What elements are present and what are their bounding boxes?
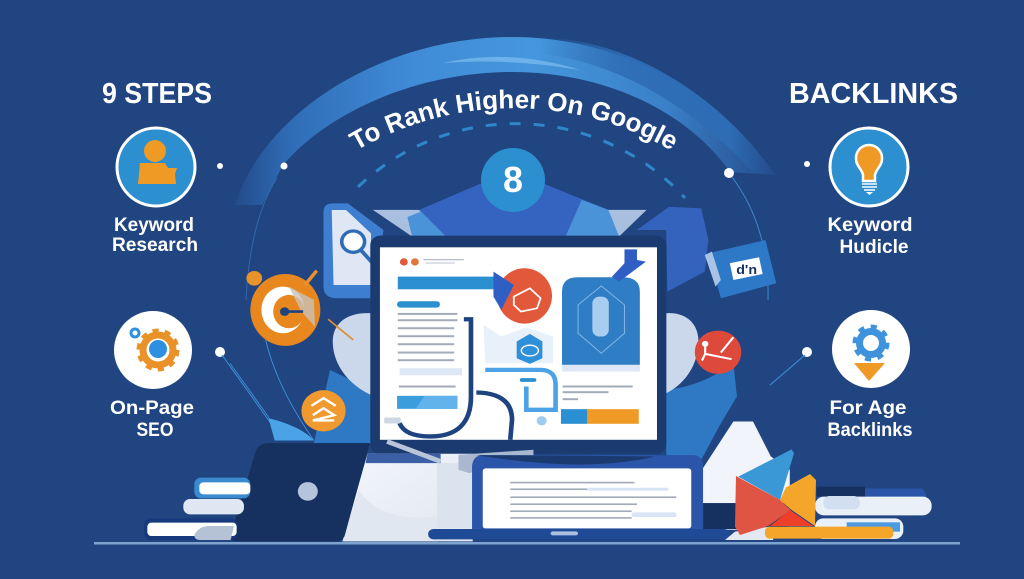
- label: on-page seo: SEO: [136, 420, 174, 441]
- icon: folder: [705, 240, 776, 298]
- icon: person: [117, 128, 195, 206]
- front laptop text lines: [510, 482, 677, 519]
- label: for age backlinks: [828, 398, 912, 441]
- label: keyword research: Research: [112, 235, 198, 256]
- heading: backlinks: BACKLINKS: [789, 78, 958, 110]
- title: curved: To Rank Higher On Google: [348, 90, 676, 148]
- dashed arc: [358, 124, 685, 198]
- books right: [815, 487, 932, 539]
- connector dots left: [215, 163, 272, 425]
- screen header: [398, 258, 494, 289]
- front laptop: [428, 455, 730, 539]
- label: keyword research: Keyword: [114, 215, 194, 236]
- badge: number 8: 8: [503, 159, 523, 200]
- label: for age backlinks: Backlinks: [828, 420, 912, 441]
- icon: red badge: [695, 331, 741, 374]
- books left: [144, 478, 250, 540]
- arch dots: [280, 162, 734, 178]
- baseline: [94, 542, 960, 544]
- label: on-page seo: [110, 398, 194, 441]
- screen red icon: [493, 268, 552, 324]
- leaves and shields: [230, 313, 737, 460]
- label: for age backlinks: For Age: [830, 398, 906, 419]
- screen stethoscope: [400, 319, 512, 440]
- central illustration: [230, 203, 790, 541]
- label: keyword hudicle: Hudicle: [840, 237, 908, 258]
- icon: orange target: [246, 271, 320, 346]
- screen text column: [397, 301, 462, 409]
- heading: 9 steps: 9 STEPS: [102, 78, 212, 110]
- screen blue panel: [562, 249, 646, 372]
- white laptop body: [342, 417, 533, 541]
- screen faucet and badge: [483, 325, 556, 425]
- monitor: [370, 236, 666, 454]
- panel: left steps: [102, 78, 212, 441]
- icon: folder: d'n: [736, 262, 757, 277]
- icon: small orange badge: [301, 390, 346, 431]
- label: keyword hudicle: [828, 215, 912, 258]
- arch: [235, 37, 775, 300]
- panel: right steps: [789, 78, 958, 441]
- dark laptop lid: [230, 443, 370, 541]
- white house shape: [703, 421, 790, 530]
- icon: gear: [114, 311, 192, 389]
- badge: number 8: [481, 148, 545, 212]
- icon: search panel: [324, 203, 384, 298]
- label: on-page seo: On-Page: [110, 398, 194, 419]
- screen lines and progress bar: [561, 386, 639, 424]
- icon: colourful folded shape: [725, 449, 893, 540]
- icon: light bulb: [830, 128, 908, 206]
- envelope shape behind monitor: [373, 184, 647, 236]
- icon: gear with arrow: [832, 310, 910, 388]
- icon: blue tab: [637, 207, 708, 292]
- connector dots right: [770, 161, 812, 385]
- label: keyword research: [112, 215, 198, 256]
- label: keyword hudicle: Keyword: [828, 215, 912, 236]
